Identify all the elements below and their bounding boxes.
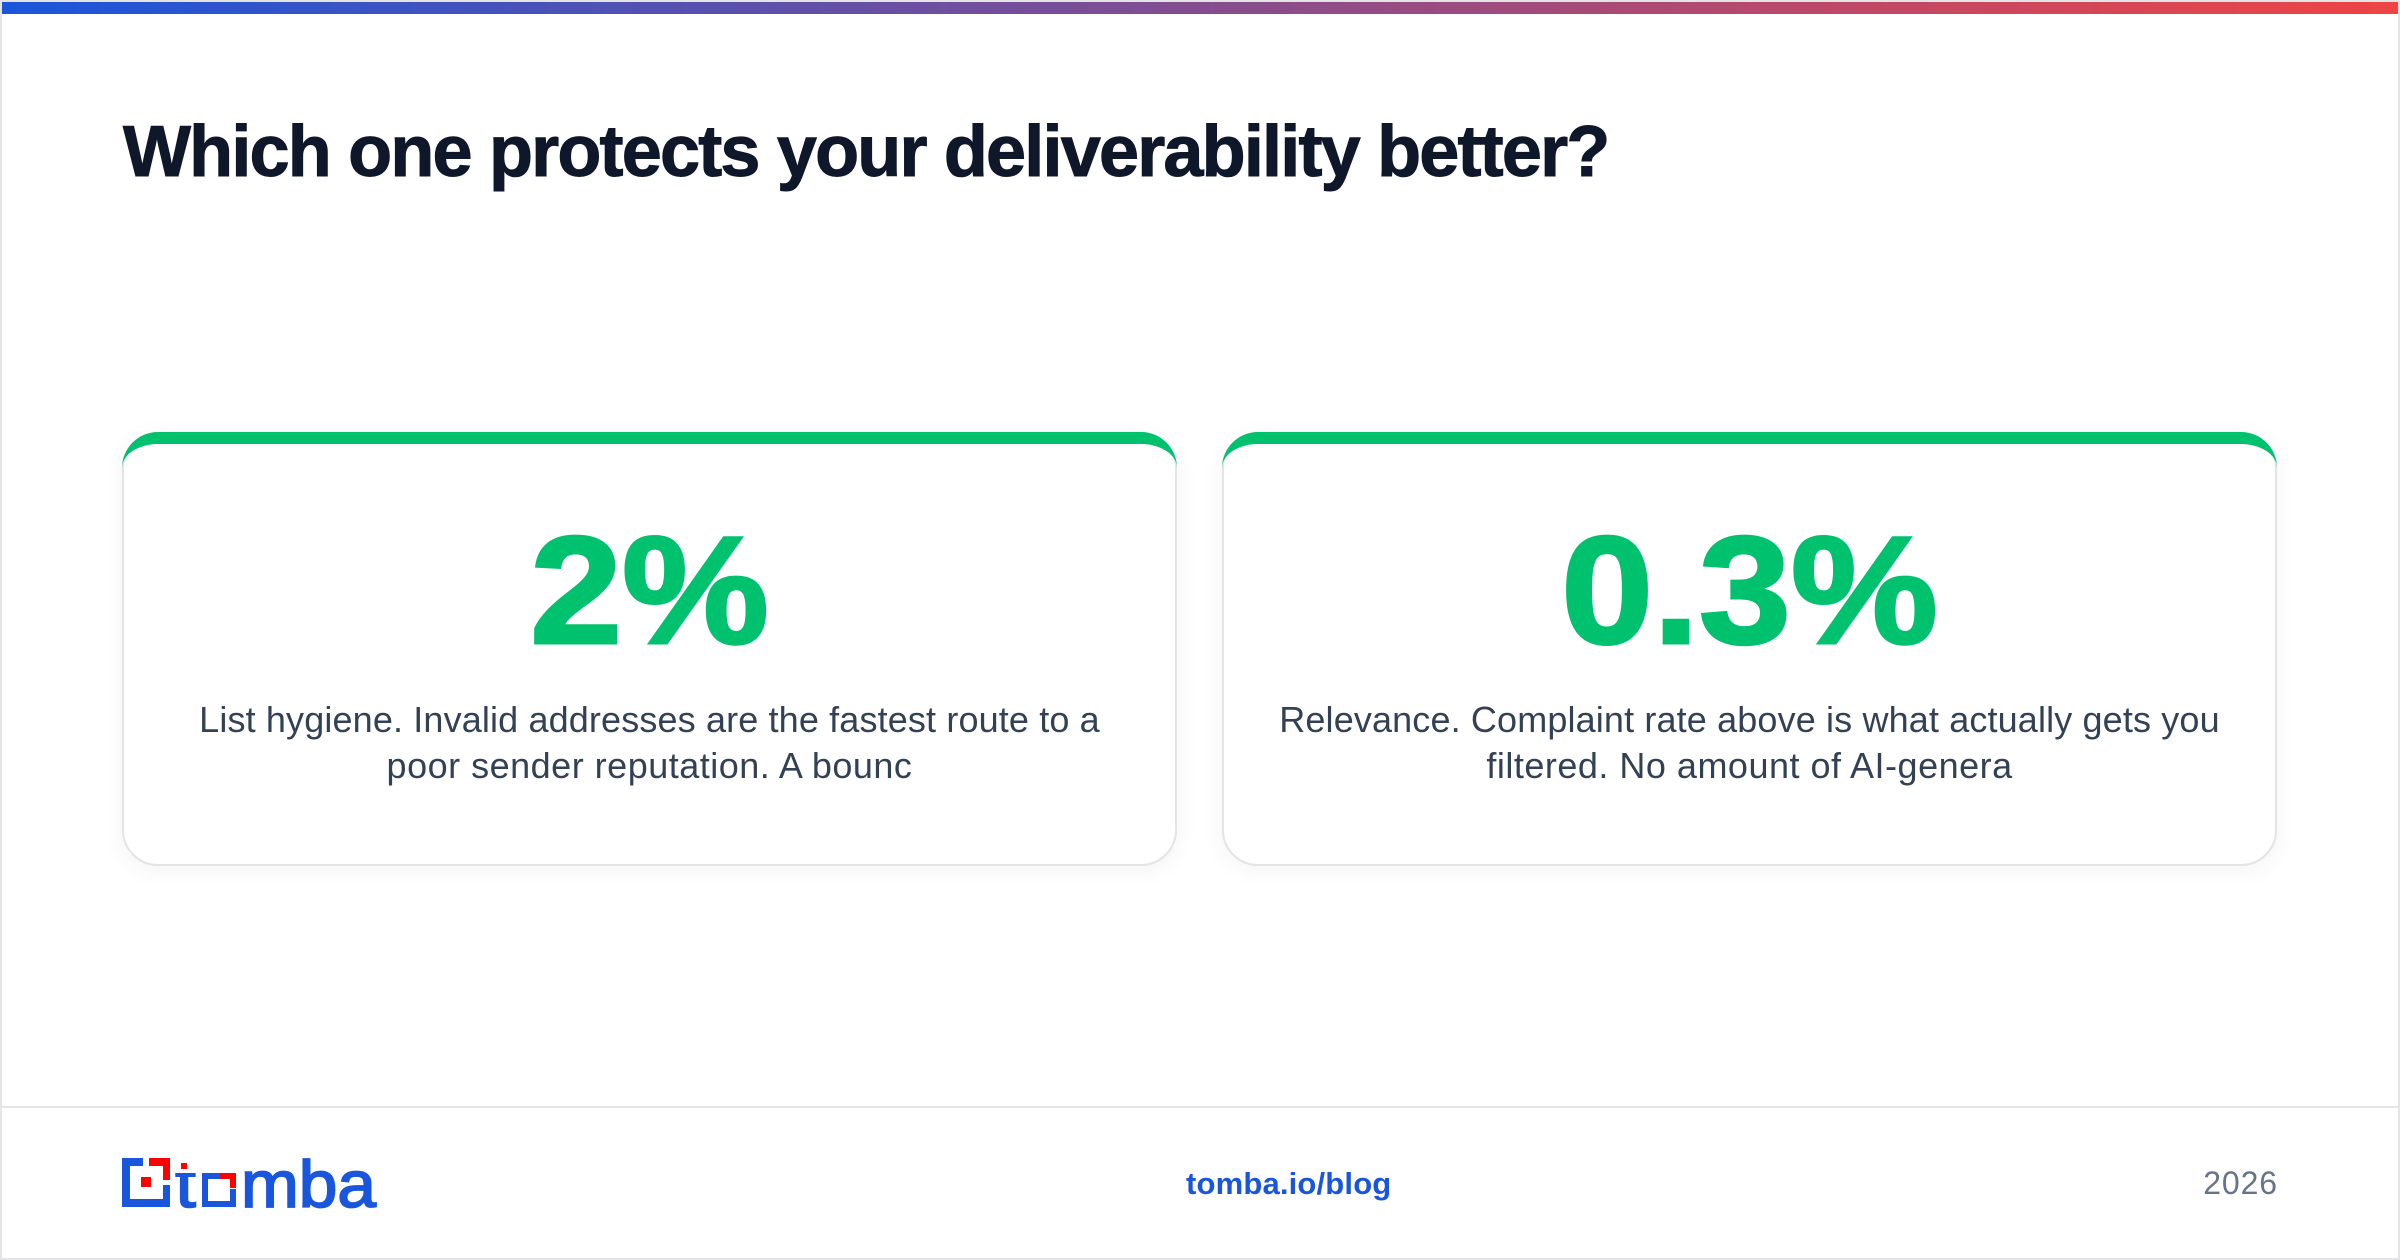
description: list hygiene: poor sender reputation. A bounc xyxy=(387,745,912,786)
footer year: 2026 xyxy=(2203,1165,2278,1201)
logo wordmark xyxy=(175,1147,376,1221)
description: relevance: filtered. No amount of AI-genera xyxy=(1486,745,2013,786)
description: relevance: Relevance. Complaint rate above is what actually gets you xyxy=(1279,699,2220,740)
icon: logo square mark xyxy=(122,1158,170,1207)
card accent top border xyxy=(122,432,1177,480)
title: Which one protects your deliverability better? xyxy=(123,112,1608,192)
top gradient bar xyxy=(2,2,2398,14)
description: relevance xyxy=(1279,699,2220,786)
footer divider xyxy=(2,1106,2398,1108)
card accent top border xyxy=(1222,432,2277,480)
logo: tomba xyxy=(122,1154,377,1212)
footer link: tomba.io/blog xyxy=(1186,1166,1391,1201)
panel: list hygiene card xyxy=(122,432,1177,866)
description: list hygiene xyxy=(199,699,1100,786)
stat: 0.3%: 0.3% xyxy=(1561,505,1938,676)
description: list hygiene: List hygiene. Invalid addresses are the fastest route to a xyxy=(199,699,1100,740)
panel: relevance card xyxy=(1222,432,2277,866)
stat: 2%: 2% xyxy=(530,505,769,676)
